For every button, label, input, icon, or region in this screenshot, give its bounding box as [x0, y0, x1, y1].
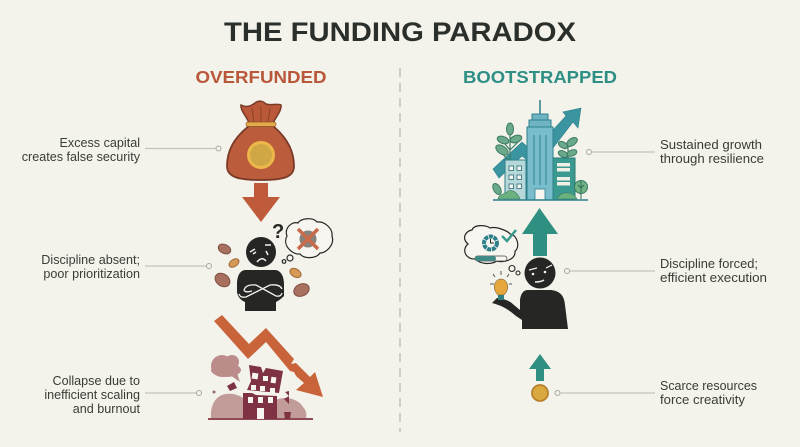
building upper	[247, 365, 283, 393]
label: sustained growth: Sustained growth	[660, 137, 762, 152]
plants	[499, 135, 520, 161]
shrubs and tree	[498, 191, 520, 199]
ground	[208, 418, 313, 420]
heading: bootstrapped: BOOTSTRAPPED	[463, 67, 617, 87]
body	[492, 290, 568, 329]
label: sustained growth	[586, 137, 764, 166]
head	[524, 258, 556, 288]
arrow: crash zigzag	[214, 315, 323, 397]
lightbulb	[494, 279, 508, 295]
label: scarce resources	[555, 378, 757, 407]
building lower	[243, 393, 277, 419]
label: collapse: Collapse due to	[52, 374, 140, 388]
arrow: bootstrapped up small	[529, 354, 551, 381]
arrow: bootstrapped up large	[522, 208, 558, 256]
label: sustained growth: through resilience	[660, 151, 764, 166]
question mark: ?	[272, 221, 284, 243]
left building	[505, 160, 526, 200]
heading: overfunded: OVERFUNDED	[196, 67, 326, 87]
label: excess capital	[22, 136, 221, 164]
smoke clouds	[211, 355, 241, 382]
label: discipline forced: efficient execution	[660, 270, 767, 285]
label: discipline absent: Discipline absent;	[41, 253, 140, 267]
check mark	[502, 230, 516, 241]
head	[246, 237, 276, 267]
right building	[553, 158, 575, 200]
label: discipline absent	[41, 253, 212, 281]
label: collapse: inefficient scaling	[44, 388, 140, 402]
label: scarce resources: Scarce resources	[660, 378, 757, 393]
icon: money bag	[227, 101, 294, 180]
label: scarce resources: force creativity	[660, 392, 746, 407]
arrow: overfunded down	[242, 183, 280, 222]
crossed arms body	[237, 270, 284, 311]
label: collapse	[44, 374, 202, 416]
debris	[227, 382, 237, 391]
icon: gold coin	[532, 385, 548, 401]
label: discipline forced: Discipline forced;	[660, 256, 758, 271]
icon: collapsing building	[208, 355, 313, 419]
icon: confused person	[213, 219, 333, 311]
label: discipline absent: poor prioritization	[43, 267, 140, 281]
label: excess capital: creates false security	[22, 150, 141, 164]
icon: thinking person with lightbulb	[465, 226, 568, 329]
label: collapse: and burnout	[73, 402, 140, 416]
gear clock	[484, 236, 497, 250]
coins	[217, 242, 232, 256]
ground	[493, 199, 588, 201]
label: discipline forced	[564, 256, 767, 285]
progress bar	[475, 256, 507, 261]
growth arrow	[493, 108, 581, 178]
tower	[539, 100, 541, 114]
thought cloud	[465, 226, 518, 263]
label: excess capital: Excess capital	[60, 136, 140, 150]
thought cloud	[286, 219, 333, 258]
icon: city with growth arrow	[491, 100, 588, 200]
title: THE FUNDING PARADOX	[224, 17, 576, 47]
